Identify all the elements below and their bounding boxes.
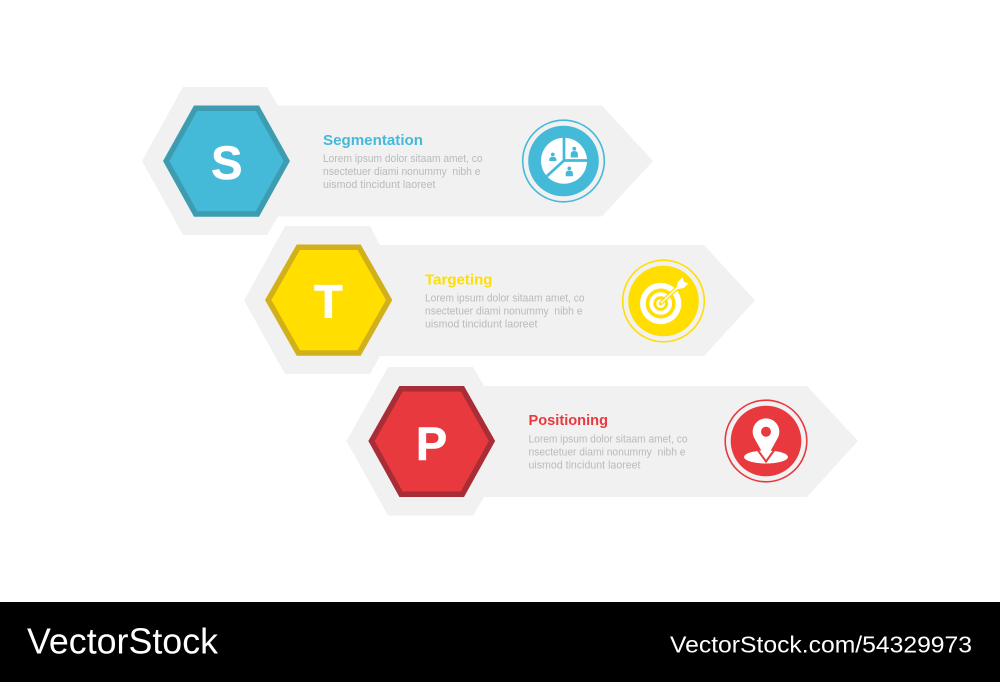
text block: Segmentation description: nsectetuer diami nonummy nibh e: [323, 166, 480, 178]
panel: Targeting: [244, 226, 755, 374]
footer bar: [0, 602, 1000, 682]
arrow banner: [142, 87, 653, 235]
text block: Targeting description: nsectetuer diami nonummy nibh e: [425, 306, 582, 318]
heading: Segmentation: Segmentation: [323, 132, 423, 149]
hexagon badge T: [268, 247, 389, 353]
footer url text: VectorStock.com/54329973: [670, 632, 972, 658]
hexagon badge P: [372, 389, 492, 494]
text block: Segmentation description: Lorem ipsum dolor sitaam amet, co: [323, 153, 482, 165]
text block: Segmentation description: uismod tincidunt laoreet: [323, 179, 436, 191]
hexagon badge P: P: [416, 417, 447, 470]
icon: pie chart with people: [523, 120, 604, 202]
text block: Positioning description: nsectetuer diami nonummy nibh e: [528, 446, 686, 458]
hexagon badge T: T: [314, 275, 343, 328]
text block: Targeting description: uismod tincidunt laoreet: [425, 318, 538, 330]
text block: Positioning description: uismod tincidunt laoreet: [528, 460, 640, 472]
arrow banner: [244, 226, 755, 374]
footer logo text: VectorStock: [27, 620, 219, 662]
hexagon badge S: S: [211, 136, 242, 189]
text block: Positioning description: Lorem ipsum dolor sitaam amet, co: [528, 434, 688, 446]
heading: Targeting: Targeting: [425, 271, 492, 288]
arrow banner: [346, 367, 858, 516]
text block: Targeting description: Lorem ipsum dolor sitaam amet, co: [425, 292, 584, 304]
icon: map pin: [725, 400, 807, 482]
panel: Positioning: [346, 367, 858, 516]
panel: Segmentation: [142, 87, 653, 235]
icon: target with dart: [623, 260, 704, 342]
hexagon badge S: [166, 108, 287, 214]
heading: Positioning: Positioning: [528, 412, 608, 429]
